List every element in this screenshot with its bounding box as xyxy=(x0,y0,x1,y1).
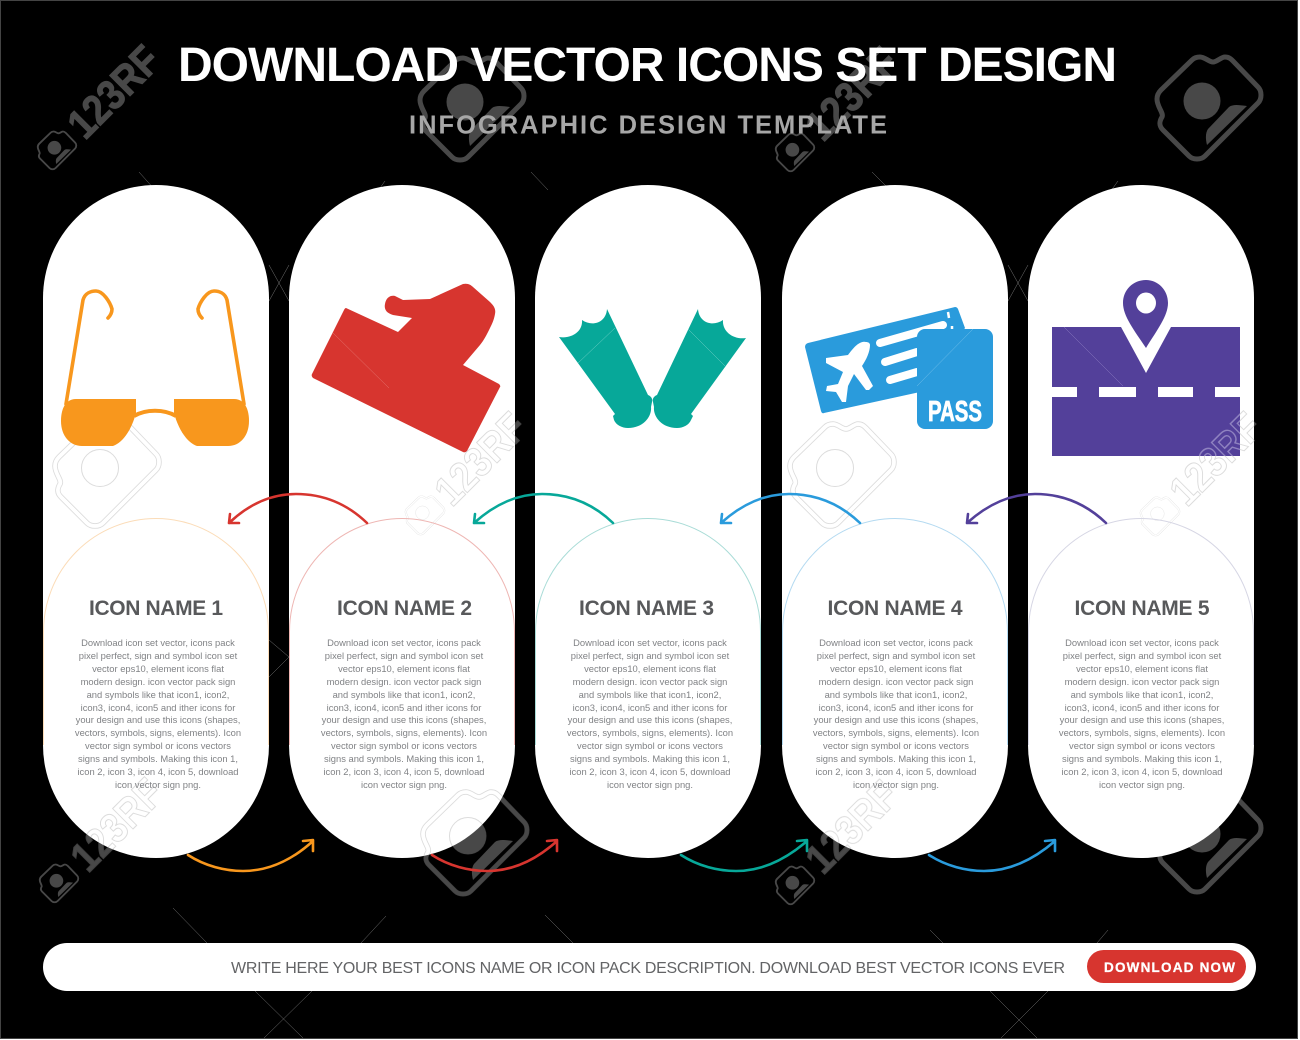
panel 2 text: ICON NAME 2 xyxy=(337,597,472,620)
icon: glasses xyxy=(61,291,249,446)
panel 3 text: vectors, symbols, signs, elements). Icon xyxy=(567,727,733,738)
watermark on white panels: 123RF xyxy=(796,771,907,882)
watermark on black background: 123RF xyxy=(796,38,907,149)
icon: mitten xyxy=(312,284,500,452)
icon: road with location pin: 123RF xyxy=(1160,403,1271,514)
panel 5 text: ICON NAME 5 xyxy=(1074,597,1210,620)
panel 3 text xyxy=(567,597,733,790)
panel 5 text: your design and use this icons (shapes, xyxy=(1060,714,1224,725)
panel 2 text: pixel perfect, sign and symbol icon set xyxy=(325,650,484,661)
panel 3 text: Download icon set vector, icons pack xyxy=(573,637,727,648)
panel 4 text xyxy=(813,597,979,790)
panel 4 text: ICON NAME 4 xyxy=(828,597,963,620)
panel 3 text: and symbols like that icon1, icon2, xyxy=(579,689,721,700)
panel 3 text: vector sign symbol or icons vectors xyxy=(577,740,723,751)
panel 4 text: icon3, icon4, icon5 and ither icons for xyxy=(819,702,973,713)
panel 1 text: icon 2, icon 3, icon 4, icon 5, download xyxy=(77,766,239,777)
panel 2 text: modern design. icon vector pack sign xyxy=(327,676,481,687)
download button xyxy=(1087,950,1246,983)
panel 1 text: ICON NAME 1 xyxy=(89,597,223,620)
panel 2 text xyxy=(321,597,487,790)
panel 1 text: your design and use this icons (shapes, xyxy=(76,714,240,725)
subtitle: INFOGRAPHIC DESIGN TEMPLATE xyxy=(409,112,887,140)
panel 5 text: modern design. icon vector pack sign xyxy=(1065,676,1219,687)
watermark on black background: 123RF xyxy=(58,36,169,147)
panel 2 text: vector eps10, element icons flat xyxy=(338,663,470,674)
panel 4 text: icon 2, icon 3, icon 4, icon 5, download xyxy=(815,766,977,777)
panel 3 text: pixel perfect, sign and symbol icon set xyxy=(571,650,730,661)
arrow: teal forward xyxy=(681,840,807,871)
panel 3 text: modern design. icon vector pack sign xyxy=(573,676,727,687)
panel 2 text: your design and use this icons (shapes, xyxy=(322,714,486,725)
panel 2 text: signs and symbols. Making this icon 1, xyxy=(324,753,484,764)
panel 3 text: signs and symbols. Making this icon 1, xyxy=(570,753,730,764)
panel 3 text: your design and use this icons (shapes, xyxy=(568,714,732,725)
arrow: orange forward xyxy=(188,840,313,871)
panel 1 text: Download icon set vector, icons pack xyxy=(81,637,235,648)
arrow: red back xyxy=(229,494,367,523)
panel 4 text: pixel perfect, sign and symbol icon set xyxy=(817,650,976,661)
panel 5 text: vectors, symbols, signs, elements). Icon xyxy=(1059,727,1225,738)
panel 5 text: Download icon set vector, icons pack xyxy=(1065,637,1219,648)
panel 4 text: signs and symbols. Making this icon 1, xyxy=(816,753,976,764)
panel 2 text: and symbols like that icon1, icon2, xyxy=(333,689,475,700)
icon: boarding pass xyxy=(805,307,993,429)
panel 5 text: vector sign symbol or icons vectors xyxy=(1069,740,1215,751)
download button: DOWNLOAD NOW xyxy=(1104,960,1235,975)
arrow: purple back xyxy=(967,494,1106,523)
panel 4 text: vector sign symbol or icons vectors xyxy=(823,740,969,751)
panel 1 text: vectors, symbols, signs, elements). Icon xyxy=(75,727,241,738)
icon: road with location pin xyxy=(1052,280,1240,456)
panel 3 text: vector eps10, element icons flat xyxy=(584,663,716,674)
icon: swim fins xyxy=(559,309,746,428)
panel 5 text xyxy=(1059,597,1225,790)
footer bar xyxy=(43,943,1256,991)
panel 1 text: modern design. icon vector pack sign xyxy=(81,676,235,687)
arrow: blue back xyxy=(721,494,860,523)
panel 3 text: icon3, icon4, icon5 and ither icons for xyxy=(573,702,727,713)
watermark on white panels: 123RF xyxy=(1160,403,1271,514)
panel 4 text: modern design. icon vector pack sign xyxy=(819,676,973,687)
panel 5 text: pixel perfect, sign and symbol icon set xyxy=(1063,650,1222,661)
watermark on black background: 123RF xyxy=(425,403,536,514)
panel 1 text: icon3, icon4, icon5 and ither icons for xyxy=(81,702,235,713)
panel 3 text: ICON NAME 3 xyxy=(579,597,714,620)
panel 5 text: signs and symbols. Making this icon 1, xyxy=(1062,753,1222,764)
panel 2 text: Download icon set vector, icons pack xyxy=(327,637,481,648)
panel 1 text: vector sign symbol or icons vectors xyxy=(85,740,231,751)
panel 2 text: icon 2, icon 3, icon 4, icon 5, download xyxy=(323,766,485,777)
panel 5 text: icon vector sign png. xyxy=(1099,779,1185,790)
panel 1 text: pixel perfect, sign and symbol icon set xyxy=(79,650,238,661)
inner outlines xyxy=(44,518,1254,745)
footer description: WRITE HERE YOUR BEST ICONS NAME OR ICON PACK DESCRIPTION. DOWNLOAD BEST VECTOR ICONS EVER xyxy=(231,960,1065,977)
panel 1 text: signs and symbols. Making this icon 1, xyxy=(78,753,238,764)
watermark on white panels: 123RF xyxy=(425,403,536,514)
watermark on black background xyxy=(38,36,1271,904)
panel 2 text: icon3, icon4, icon5 and ither icons for xyxy=(327,702,481,713)
panel pills xyxy=(43,185,1254,858)
panel 5 text: and symbols like that icon1, icon2, xyxy=(1071,689,1213,700)
panel 5 text: icon 2, icon 3, icon 4, icon 5, download xyxy=(1061,766,1223,777)
arrow: teal back xyxy=(474,494,613,523)
panel 3 text: icon 2, icon 3, icon 4, icon 5, download xyxy=(569,766,731,777)
panel 1 text: and symbols like that icon1, icon2, xyxy=(87,689,229,700)
panel 4 text: your design and use this icons (shapes, xyxy=(814,714,978,725)
watermark on black background: 123RF xyxy=(61,769,172,880)
panel 5 text: icon3, icon4, icon5 and ither icons for xyxy=(1065,702,1219,713)
panel 2 text: icon vector sign png. xyxy=(361,779,447,790)
panel 5 text: vector eps10, element icons flat xyxy=(1076,663,1208,674)
panel 3 text: icon vector sign png. xyxy=(607,779,693,790)
panel 4 text: vectors, symbols, signs, elements). Icon xyxy=(813,727,979,738)
panel 1 text: icon vector sign png. xyxy=(115,779,201,790)
watermark on white panels xyxy=(55,403,1271,894)
panel 2 text: vector sign symbol or icons vectors xyxy=(331,740,477,751)
icon: boarding pass: PASS xyxy=(928,396,982,428)
panel 4 text: Download icon set vector, icons pack xyxy=(819,637,973,648)
panel 2 text: vectors, symbols, signs, elements). Icon xyxy=(321,727,487,738)
panel 1 text: vector eps10, element icons flat xyxy=(92,663,224,674)
watermark on white panels: 123RF xyxy=(61,769,172,880)
panel 4 text: and symbols like that icon1, icon2, xyxy=(825,689,967,700)
panel 1 text xyxy=(75,597,241,790)
panel 4 text: vector eps10, element icons flat xyxy=(830,663,962,674)
hairline marks xyxy=(139,172,1118,1038)
watermark on black background: 123RF xyxy=(796,771,907,882)
watermark on black background: 123RF xyxy=(1160,403,1271,514)
arrow: red forward xyxy=(432,840,557,871)
arrow: blue forward xyxy=(929,840,1055,871)
panel 4 text: icon vector sign png. xyxy=(853,779,939,790)
title: DOWNLOAD VECTOR ICONS SET DESIGN xyxy=(178,39,1117,92)
